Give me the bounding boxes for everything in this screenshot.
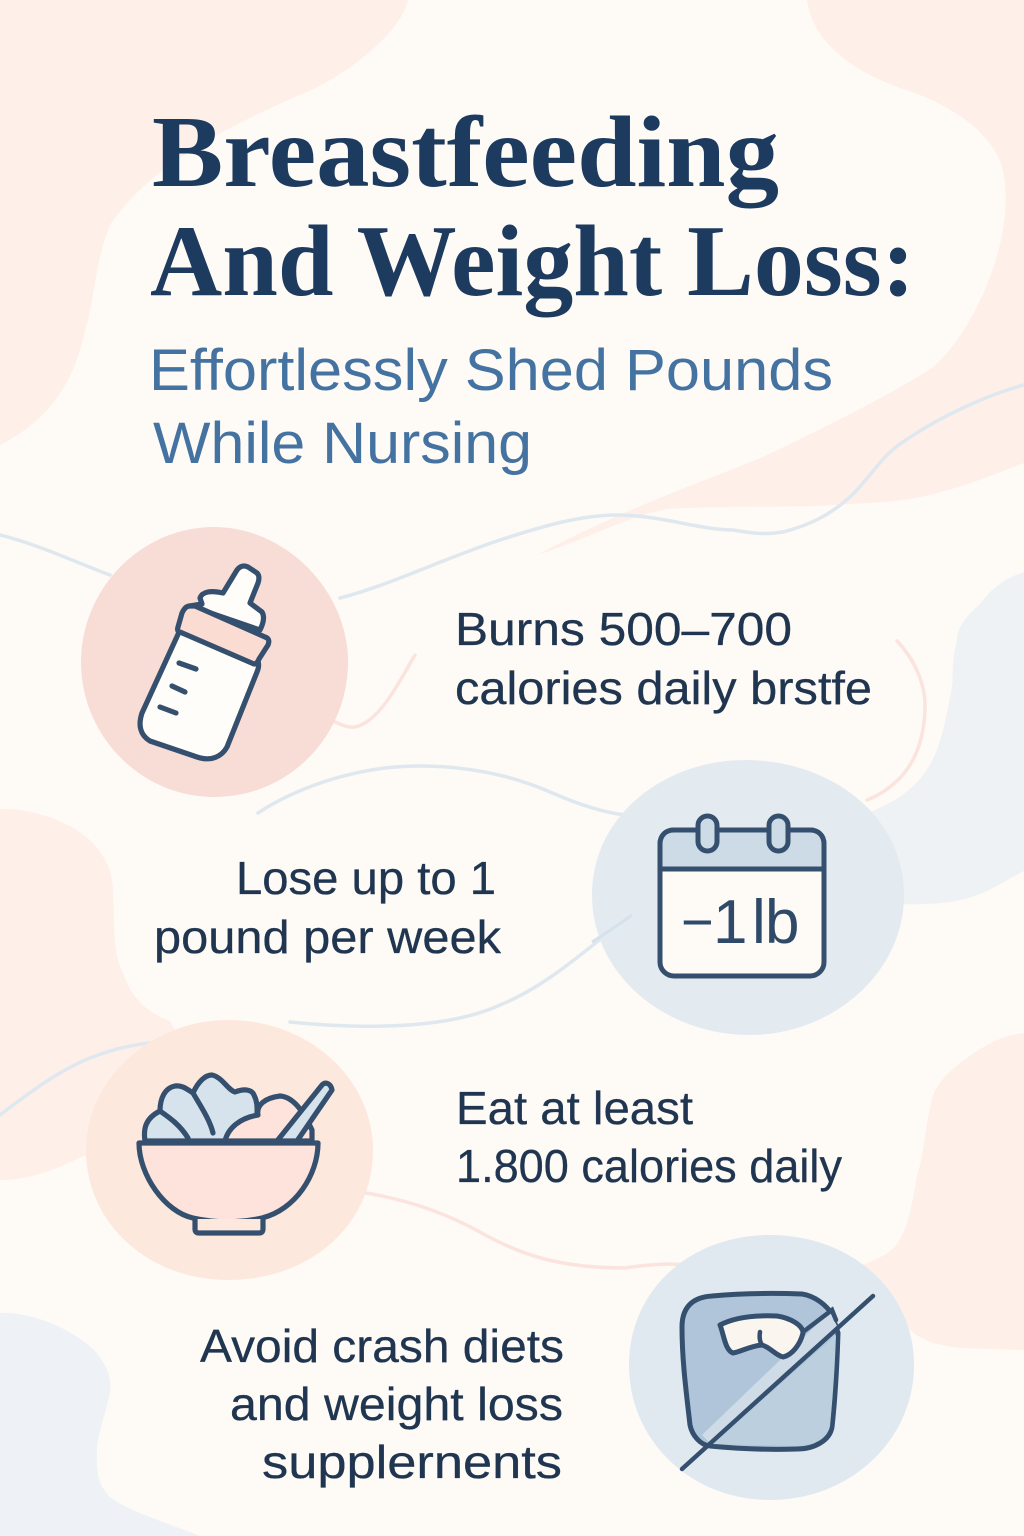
peach circle backdrop [86,1020,373,1280]
title: And Weight Loss: [150,205,915,318]
text: lose up to 1 pound: Lose up to 1 [236,852,496,904]
text: eat at least 1,800 calories: Eat at least [456,1082,693,1134]
panel: weekly weight loss [154,760,904,1035]
pink circle backdrop [81,527,348,797]
subtitle [149,338,833,476]
icon: salad bowl [139,1075,332,1233]
icon: calendar: 1 [713,888,747,957]
subtitle: Effortlessly Shed Pounds [149,338,833,403]
icon: calendar: − [681,890,714,953]
panel: avoid crash diets [200,1235,914,1500]
text: burns calories [455,603,872,714]
panel: calories burned [81,527,872,797]
panel: minimum calories [86,1020,842,1280]
icon: baby bottle [140,566,269,759]
icon: calendar: l [752,888,766,957]
icon: calendar: b [765,888,799,957]
title [150,96,915,318]
text: lose up to 1 pound: pound per week [154,911,502,963]
text: eat at least 1,800 calories: 1.800 calories daily [456,1140,842,1192]
subtitle: While Nursing [153,411,532,476]
text: avoid crash diets and supplements: supplernents [262,1436,562,1488]
text: avoid crash diets and supplements: and weight loss [230,1378,563,1430]
text: eat at least 1,800 calories [456,1082,842,1192]
text: avoid crash diets and supplements [200,1320,564,1488]
icon: calendar [660,816,824,976]
blue circle backdrop [629,1235,914,1500]
text: burns calories: Burns 500–700 [455,603,792,655]
blue circle backdrop [592,760,904,1035]
title: Breastfeeding [152,96,779,209]
text: lose up to 1 pound [154,852,502,963]
faint line over circle [592,915,632,942]
icon: crossed-out scale [682,1293,873,1469]
text: avoid crash diets and supplements: Avoid crash diets [200,1320,564,1372]
text: burns calories: calories daily brstfe [455,662,872,714]
